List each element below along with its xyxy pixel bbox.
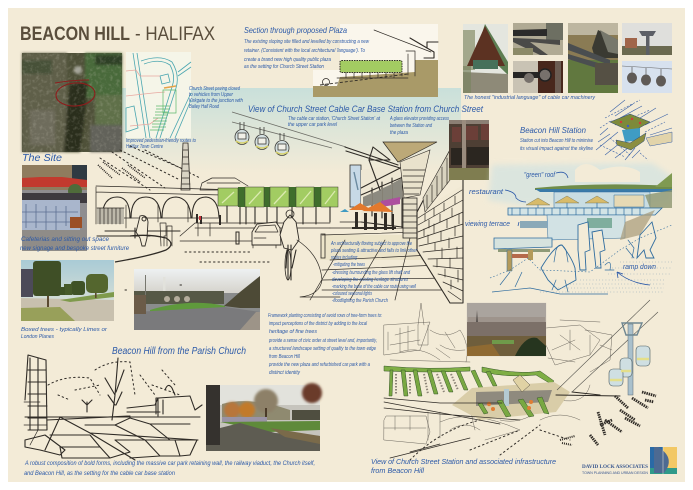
parish church caption [24,460,315,477]
middle notes: -floodlighting the Parish Church [332,298,388,304]
cafe caption: new signage and bespoke street furniture [20,246,130,252]
photo of church street and viaduct [134,269,260,330]
gondola two [255,127,269,150]
restaurant labels [465,170,656,271]
upper glass [554,192,650,208]
gondola three [275,133,289,156]
churchyard photo [206,383,322,451]
photo of building by wall [449,120,489,180]
logo wordmark [582,464,649,475]
teal sky wash [122,88,461,173]
parked cars [396,374,458,394]
isometric station diagram [596,100,672,160]
chimney [181,143,190,190]
cafe photo [22,165,87,251]
plaza lower trees [478,397,549,417]
aerial photo of the site [22,53,122,152]
photo: three gondolas [622,61,672,93]
heading: beacon hill from the parish church: Beacon Hill from the Parish Church [112,346,246,357]
parish church caption: and Beacon Hill, as the setting for the cable car base station [24,470,176,477]
framework planting notes: heritage of fine trees [269,329,318,335]
station notes [288,116,449,136]
main street perspective sketch [96,142,463,303]
restaurant labels: ramp down [623,264,656,271]
upper deck [508,208,662,215]
top hedge bands [384,366,470,372]
umbrellas and diners [340,202,396,230]
framework planting notes: from Beacon Hill [269,354,301,360]
middle notes: -dressing /surrounding the glass lift shaft and [332,270,410,276]
gondola one [235,122,249,144]
framework planting notes: impact perceptions of the district by adding to the local [269,321,368,327]
hedges above plaza [218,187,338,224]
middle notes: plaza seating & attractive and falls to link other [330,248,417,254]
framework planting notes: provide the new plaza and refurbished car park with a [268,362,370,368]
logo wordmark: DAVID LOCK ASSOCIATES [582,464,648,470]
hillside dashes [100,146,200,190]
cable lines and gondolas [232,112,346,156]
station notes: The cable car station, 'Church Street Station' at [288,116,381,122]
foreground tree scribbles [590,392,656,445]
map notes: to vehicles from Upper [189,92,233,98]
restaurant sketch [465,163,672,294]
middle notes: An architecturally flowing subject to approve the [330,241,412,247]
brick retaining wall [417,150,463,303]
map notes: Church Street paving closed [189,86,240,92]
beacon hill station text [520,126,593,152]
cable lines [557,300,658,392]
section heading and text: The existing sloping site filled and levelled by constructing a new [244,39,369,45]
middle notes: developing the existing heritage structures [332,277,408,283]
framework planting notes [268,313,382,376]
photo: bullwheel [513,61,563,93]
aerial sketch caption: View of Church Street Station and associated infrastructure [371,459,556,466]
beacon hill station text: Station cut into Beacon Hill to minimise [520,138,593,144]
restaurant labels: restaurant [469,189,504,196]
machinery photos [463,23,672,93]
colonnade building [345,142,437,238]
red ring marking the site [55,80,96,107]
cafe caption [20,237,130,252]
framework planting notes: Framework planting consisting of avoid rows of tree-form trees to: [268,313,382,319]
green roof [535,173,672,192]
station notes: the upper car park level [288,122,338,128]
lower deck [494,238,552,249]
beacon hill station text: Beacon Hill Station [520,126,587,135]
boxed trees caption: London Planes [21,334,54,340]
boxed trees caption [21,327,107,340]
cafe caption: Cafeterias and sitting out space [21,237,110,243]
framework planting notes: distinct identity [269,370,300,376]
plaza surface [452,382,570,420]
title: - HALIFAX [135,23,215,45]
restaurant labels: viewing terrace [465,221,510,228]
large gondolas [609,346,650,386]
heading: the site: The Site [22,152,62,164]
map notes [126,86,243,150]
aerial sketch caption [371,459,556,475]
david lock associates logo [650,447,677,474]
section heading and text: Section through proposed Plaza [244,25,347,35]
station notes: A glass elevator providing access [389,116,449,122]
paving lines [297,222,450,300]
map notes: Bailey Hall Road [189,104,219,110]
parked car [252,222,281,248]
cyclist [280,210,299,280]
lower glass [547,215,625,240]
heading: view of church street: View of Church Street Cable Car Base Station from Church Street [248,104,483,114]
section heading and text: as the setting for Church Street Station [244,64,324,70]
umbrellas [526,196,609,205]
station notes: between the Station and [390,123,432,129]
section heading and text: retainer. (Consistent with the local architectural 'language'). To [244,48,365,54]
framework planting notes: a structured landscape setting of quality to the town edge [269,346,376,352]
boxed trees photo [21,260,114,321]
title: BEACON HILL [20,23,130,45]
car park tree rows [389,370,497,396]
map notes: Improved pedestrian-friendly routes to [126,138,196,144]
middle notes: -mitigating the trees [333,262,365,268]
logo wordmark: TOWN PLANNING AND URBAN DESIGN [582,471,649,475]
boxed trees caption: Boxed trees - typically Limes or [21,327,107,333]
map notes: Halifax Town Centre [126,144,163,150]
photo: pylon [622,23,672,55]
middle notes [330,241,417,304]
restaurant labels: "green" roof [524,170,556,179]
middle notes: -marking the base of the cable car route using well [332,284,417,290]
section heading and text [244,25,369,70]
leader arrows [505,172,650,285]
pedestrian route map [126,52,191,138]
parish church caption: A robust composition of bold forms, including the massive car park retaining wall, the railway viaduct, the Church itself, [24,460,315,467]
photo: wide machinery with roof [568,23,618,93]
section drawing through plaza [313,24,438,97]
middle notes: routes including: [331,255,358,261]
photo: chalet station [463,24,508,93]
sky wash [488,163,670,205]
town linework [384,303,612,444]
standing figures [578,222,590,270]
title [20,23,215,45]
roads [384,398,520,424]
station notes: the plaza [390,130,408,136]
parish church sketch [24,355,202,460]
plaza steps and people [97,214,330,290]
curved kerb [115,235,171,262]
slope and stipple [490,225,672,294]
viaduct [96,186,240,228]
ground section [313,60,438,97]
hillside dots [410,420,570,460]
distant station roof [200,178,248,190]
beacon hill station text: its visual impact against the skyline [520,146,593,152]
photo: cable wheels top [513,23,563,55]
map notes: Kirkgate to the junction with [189,98,243,104]
section hedge [340,60,402,72]
machinery caption: The honest "industrial language" of cable car machinery [464,95,596,101]
framework planting notes: provide a sense of civic order at street level and, importantly, [268,338,377,344]
seated woman [541,245,576,290]
middle notes: -coloured seasonal lights [332,291,372,297]
section heading and text: create a brand new high quality public plaza [244,57,331,63]
pylon [622,323,642,395]
aerial sketch caption: from Beacon Hill [371,468,424,475]
sign tower [350,165,361,207]
town view photo [467,303,546,356]
aerial sketch of church street station [384,300,658,460]
